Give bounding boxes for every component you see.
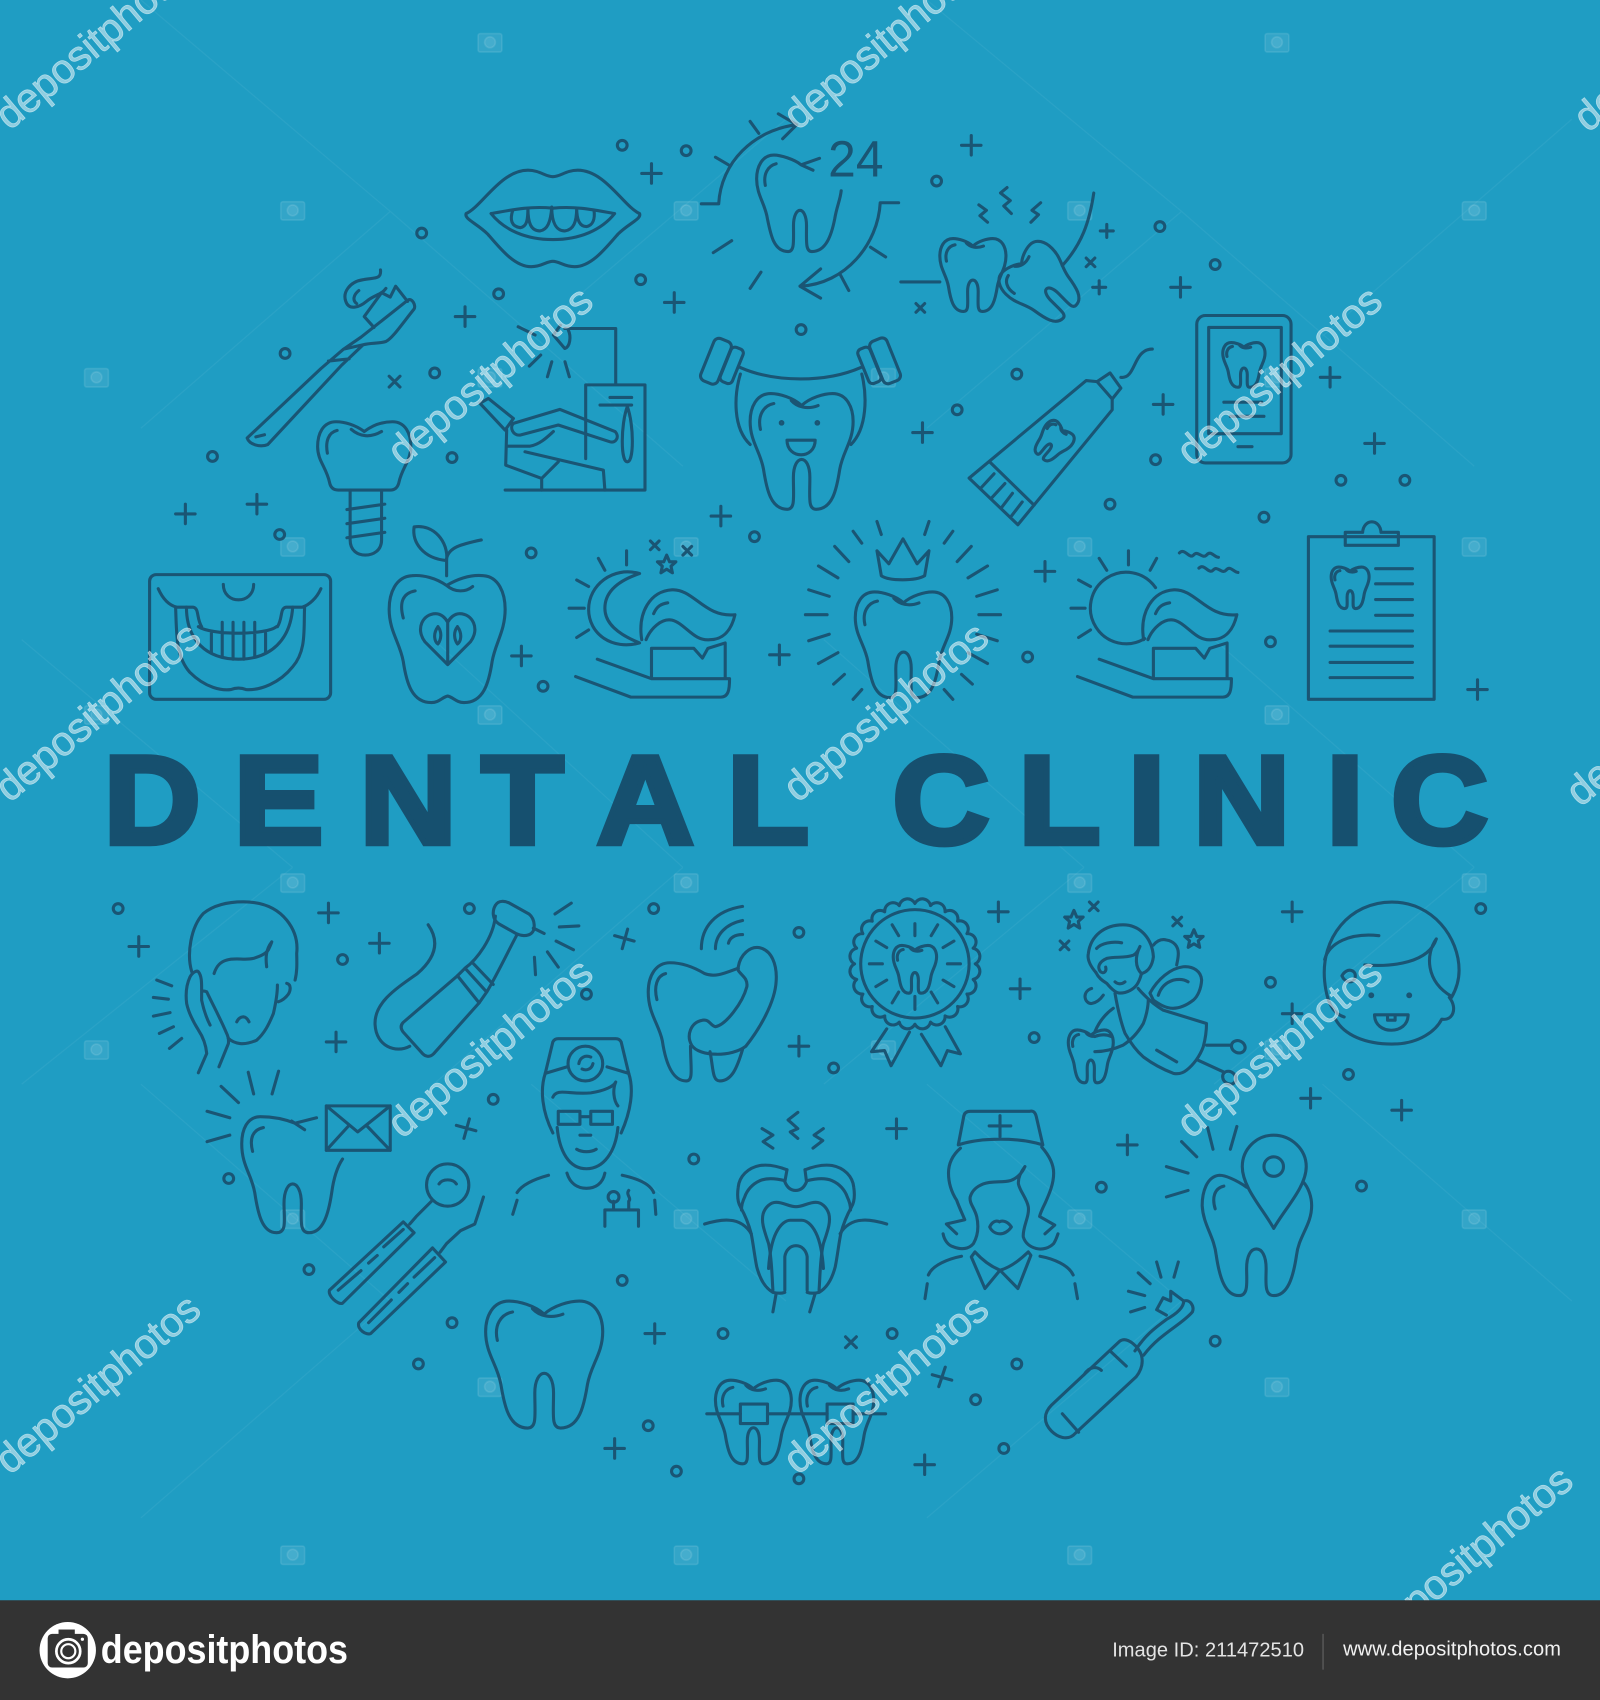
decorative plus signs and crosses <box>129 136 1487 1474</box>
website: www.depositphotos.com <box>1342 1639 1561 1661</box>
watermarks: depositphotos <box>1168 277 1391 474</box>
footer bar <box>0 1600 1600 1700</box>
icon: toothbrush with paste <box>247 270 415 446</box>
icon: award rosette <box>850 899 980 1066</box>
icon: night brushing with moon <box>569 551 735 697</box>
icon: person with toothache <box>153 902 297 1073</box>
icon: apple with heart <box>389 527 505 703</box>
icon: smartphone with tooth <box>1197 315 1291 463</box>
icon: tooth with telephone <box>648 906 776 1081</box>
icon: 24 hour tooth care: 24 <box>828 131 883 188</box>
footer logo icon <box>40 1622 96 1678</box>
icon: dental mirror and probe <box>329 1164 483 1334</box>
icon: smiling child <box>1324 902 1459 1044</box>
title: DENTAL CLINIC <box>104 730 1488 871</box>
icon: strong tooth lifting barbell <box>699 336 902 509</box>
watermark camera marks <box>85 34 1486 1564</box>
icon: tooth with location pin <box>1166 1126 1312 1296</box>
watermarks: depositphotos <box>1168 949 1391 1146</box>
icon: shining tooth with crown <box>805 521 1001 699</box>
icon: dentist <box>513 1039 656 1226</box>
footer logo wordmark: depositphotos <box>101 1628 348 1672</box>
watermarks: depositphotos <box>774 613 997 810</box>
icon: dental drill handpiece <box>375 901 579 1056</box>
icon: tooth <box>486 1301 603 1428</box>
icon: dental implant <box>318 422 411 555</box>
icon: panoramic x-ray <box>150 575 331 699</box>
watermarks: depositphotos <box>378 277 601 474</box>
icon: smiling lips <box>466 170 640 267</box>
icon: aching wisdom tooth <box>901 188 1094 335</box>
watermarks: depositphotos <box>1358 1456 1581 1654</box>
icon: clipboard dental record <box>1308 522 1434 699</box>
watermarks: depositphotos <box>774 1285 997 1482</box>
icon: teeth with braces <box>707 1380 886 1464</box>
icon: tooth with envelope <box>207 1071 390 1233</box>
watermarks: depositphotos <box>378 949 601 1146</box>
icon: nurse <box>925 1111 1078 1299</box>
icon: dental chair <box>480 325 645 490</box>
icon: tooth root cross-section <box>705 1112 887 1312</box>
decorative dots <box>113 140 1486 1484</box>
icon: toothpaste tube <box>969 349 1152 525</box>
icon: electric toothbrush <box>1045 1262 1193 1438</box>
icon: tooth fairy <box>1065 910 1247 1087</box>
divider <box>1322 1634 1324 1670</box>
image id: Image ID: 211472510 <box>1112 1640 1304 1662</box>
icon: morning brushing with sun <box>1071 551 1238 697</box>
icon: 24 hour tooth care <box>701 114 899 298</box>
